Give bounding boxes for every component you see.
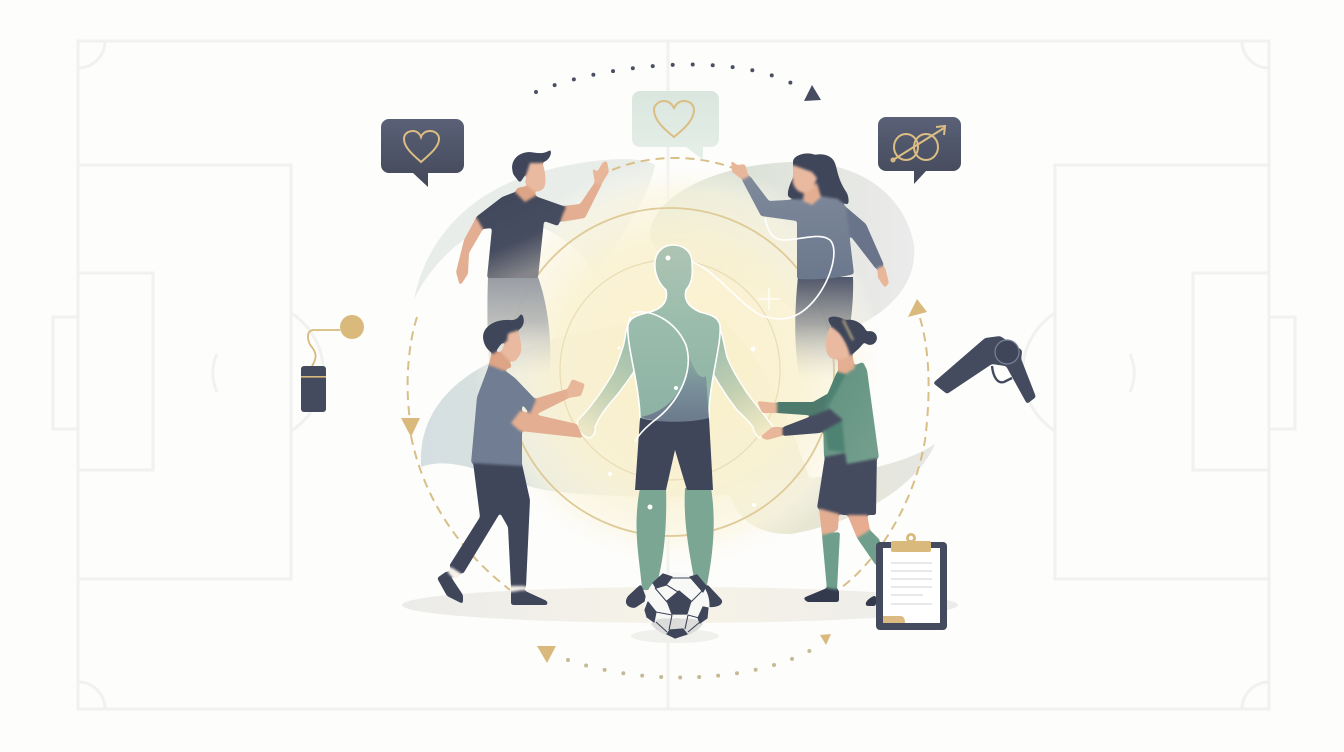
sparkle — [758, 288, 780, 310]
swirl: lower left — [421, 318, 810, 497]
swirl: upper left — [414, 159, 655, 300]
waist shading — [641, 358, 709, 423]
shorts — [817, 450, 877, 515]
ball shadow — [631, 629, 719, 643]
arrow: bottom right gold — [820, 634, 831, 645]
swirl: upper right — [650, 162, 914, 335]
dotted arc top — [536, 65, 795, 92]
inner top — [824, 372, 847, 452]
forearm green — [777, 394, 840, 417]
arrow: right gold — [908, 299, 927, 317]
trousers — [449, 462, 530, 587]
hair — [483, 313, 524, 354]
left arm — [577, 318, 642, 438]
socks — [448, 567, 525, 593]
upper body — [456, 149, 609, 286]
clipboard — [876, 533, 947, 630]
figure: lower-right woman — [757, 316, 880, 606]
speech bubble: centre heart — [632, 91, 719, 160]
white flow line — [632, 218, 834, 442]
upper forearm — [529, 389, 569, 418]
upper hand — [567, 379, 585, 398]
front leg — [819, 508, 839, 535]
figure: lower-left man — [437, 313, 585, 605]
swirl shapes — [414, 159, 935, 534]
referee whistle — [933, 336, 1036, 404]
shoes — [803, 588, 839, 602]
face — [501, 330, 521, 362]
whistle on cord — [301, 315, 364, 412]
bun — [863, 331, 877, 345]
gold orbit rings — [506, 208, 834, 536]
lower arm — [511, 411, 583, 438]
speech bubble: left heart — [381, 119, 464, 187]
shoes — [626, 584, 722, 608]
rear sock — [857, 530, 880, 567]
central glow — [473, 160, 883, 570]
arrow: left gold — [401, 418, 420, 437]
right arm — [705, 318, 773, 438]
legs — [637, 488, 666, 590]
white highlight spots — [608, 256, 756, 510]
shirt — [823, 362, 879, 464]
arrow: bottom left gold — [537, 646, 556, 663]
football — [644, 572, 710, 638]
dashed cycle arcs — [408, 158, 929, 590]
ground shadow — [402, 587, 958, 623]
trousers — [487, 277, 550, 375]
rear leg — [847, 514, 870, 538]
upper body — [731, 153, 889, 288]
torso and head — [628, 245, 720, 420]
neck — [488, 352, 512, 372]
tee — [471, 365, 536, 466]
shoes — [437, 571, 463, 604]
forearm dark — [783, 409, 843, 436]
speech bubble: linked rings and arrow — [878, 117, 961, 184]
face — [826, 327, 850, 360]
neck — [838, 353, 855, 374]
swirl: lower right — [728, 444, 935, 534]
figure: top-right woman — [731, 153, 889, 380]
cycle arrow triangles — [401, 85, 927, 663]
front sock — [822, 532, 840, 590]
figure: centre player — [577, 245, 773, 608]
dotted arc bottom — [568, 648, 815, 677]
arrow: top dark — [804, 85, 821, 101]
trousers — [795, 277, 853, 380]
figure: top-left man — [456, 149, 609, 375]
hair — [828, 316, 867, 356]
shorts — [635, 418, 713, 490]
hands — [757, 401, 777, 413]
headband — [843, 320, 853, 340]
